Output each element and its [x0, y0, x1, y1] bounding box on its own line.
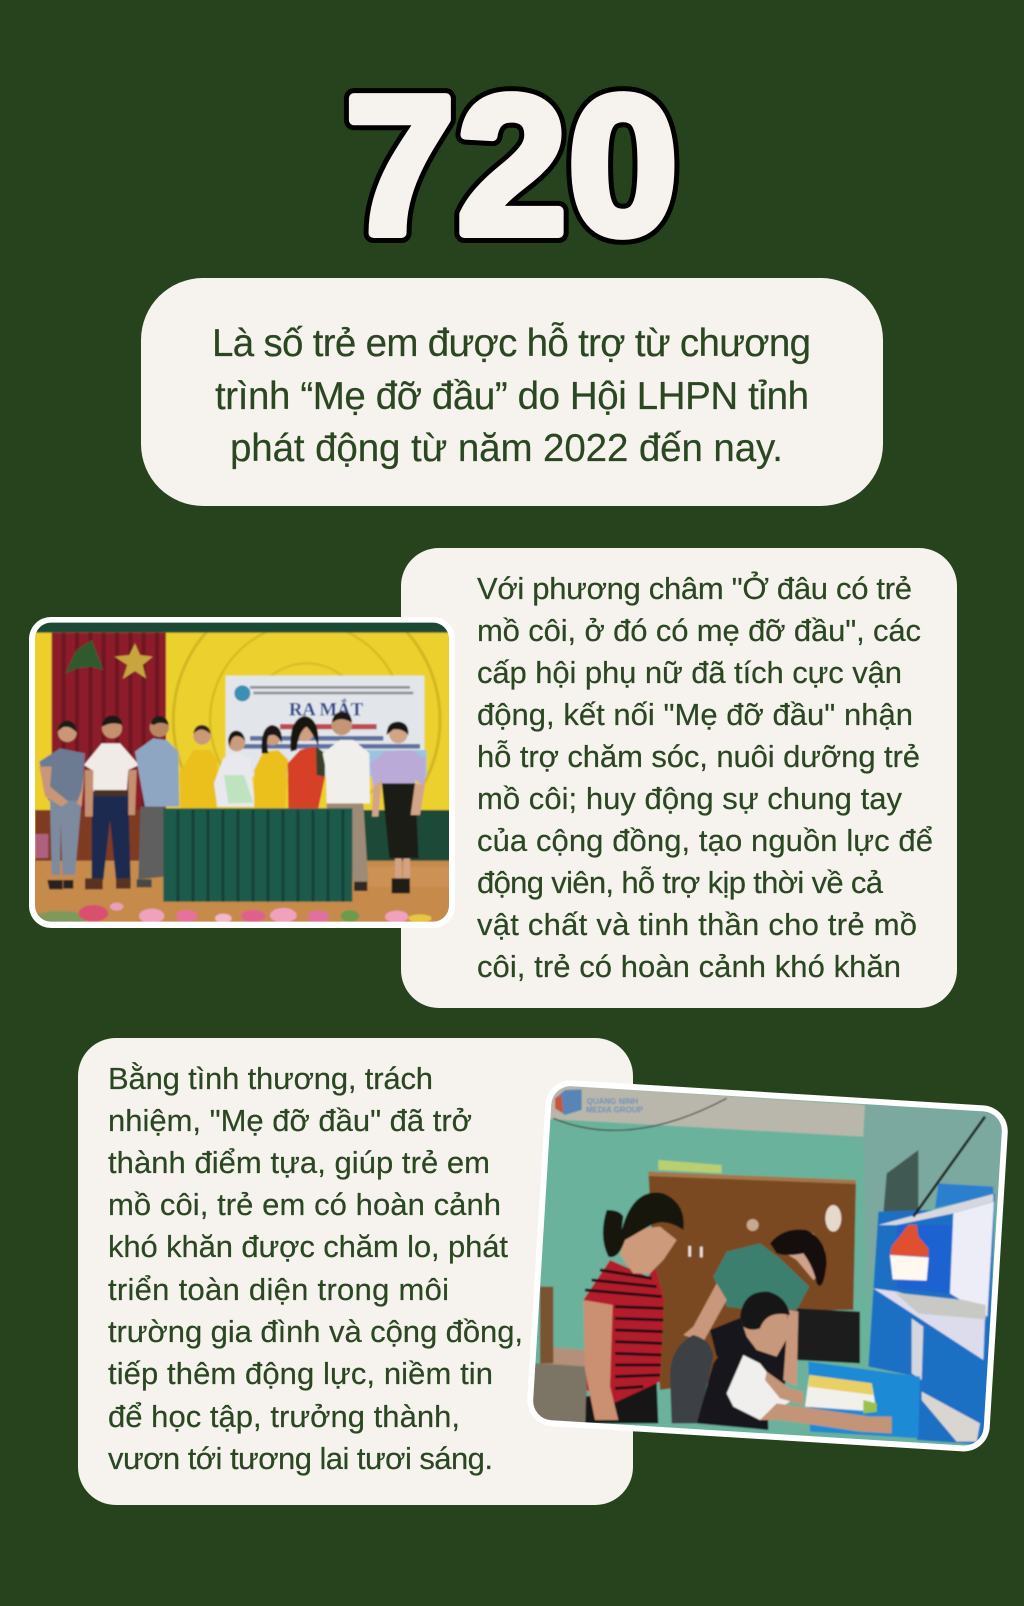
- motto paragraph: côi, trẻ có hoàn cảnh khó khăn: [477, 949, 901, 984]
- big number 720: 7: [345, 56, 455, 275]
- people: [39, 712, 425, 893]
- logo watermark: QUANG NINH: [587, 1097, 638, 1106]
- role paragraph: trường gia đình và cộng đồng,: [108, 1314, 523, 1349]
- role paragraph: nhiệm, "Mẹ đỡ đầu" đã trở: [108, 1103, 472, 1138]
- woman in green blouse: [683, 1229, 827, 1390]
- panel: mothers' role text: [78, 1038, 633, 1505]
- role paragraph: khó khăn được chăm lo, phát: [108, 1229, 508, 1264]
- table with pleated cloth: [163, 808, 352, 902]
- motto paragraph: của cộng đồng, tạo nguồn lực để: [477, 823, 933, 858]
- photo: home visit to a child at a study desk: [520, 1070, 1020, 1460]
- motto paragraph: Với phương châm "Ở đâu có trẻ: [477, 570, 912, 606]
- role paragraph: vươn tới tương lai tươi sáng.: [108, 1441, 493, 1476]
- motto paragraph: mồ côi, ở đó có mẹ đỡ đầu", các: [477, 613, 921, 648]
- photo scene: [533, 1086, 1002, 1446]
- role paragraph: để học tập, trưởng thành,: [108, 1399, 460, 1434]
- big number 720: 7: [345, 56, 455, 275]
- motto paragraph: động viên, hỗ trợ kịp thời về cả: [477, 865, 884, 900]
- open booklet: [805, 1375, 877, 1413]
- boy at desk: [697, 1292, 892, 1433]
- role paragraph: thành điểm tựa, giúp trẻ em: [108, 1145, 490, 1180]
- big number 720: 2: [457, 56, 567, 275]
- motto paragraph: [477, 570, 933, 984]
- shelf unit: [808, 1183, 995, 1445]
- big number 720: [345, 56, 678, 275]
- motto paragraph: động, kết nối "Mẹ đỡ đầu" nhận: [477, 697, 913, 732]
- logo watermark: MEDIA GROUP: [586, 1106, 644, 1115]
- motto paragraph: cấp hội phụ nữ đã tích cực vận: [477, 655, 902, 690]
- woman in striped shirt: [583, 1192, 684, 1423]
- panel: intro statement: [141, 278, 883, 506]
- photo frame: [29, 617, 455, 928]
- logo watermark: [555, 1089, 644, 1115]
- big number 720: 0: [568, 56, 678, 275]
- intro text: phát động từ năm 2022 đến nay.: [230, 427, 783, 470]
- lamp: [890, 1225, 929, 1281]
- motto paragraph: hỗ trợ chăm sóc, nuôi dưỡng trẻ: [477, 739, 920, 774]
- intro text: trình “Mẹ đỡ đầu” do Hội LHPN tỉnh: [215, 375, 809, 418]
- photo scene: [35, 622, 449, 922]
- role paragraph: Bằng tình thương, trách: [108, 1061, 433, 1096]
- intro text: [212, 322, 811, 470]
- role paragraph: [108, 1061, 523, 1476]
- role paragraph: mồ côi, trẻ em có hoàn cảnh: [108, 1187, 501, 1222]
- chair: [670, 1335, 713, 1423]
- role paragraph: tiếp thêm động lực, niềm tin: [108, 1356, 493, 1391]
- photo: launch ceremony group: [29, 587, 455, 928]
- intro text: Là số trẻ em được hỗ trợ từ chương: [212, 322, 811, 365]
- photo scene: RA MẮT: [289, 698, 364, 720]
- motto paragraph: mồ côi; huy động sự chung tay: [477, 781, 902, 816]
- motto paragraph: vật chất và tinh thần cho trẻ mồ: [477, 907, 917, 942]
- photo frame: [526, 1079, 1009, 1453]
- role paragraph: triển toàn diện trong môi: [108, 1272, 449, 1307]
- big number 720: 2: [457, 56, 567, 275]
- panel: motto text: [401, 548, 957, 1008]
- big number 720: 0: [568, 56, 678, 275]
- flowers: [38, 902, 432, 922]
